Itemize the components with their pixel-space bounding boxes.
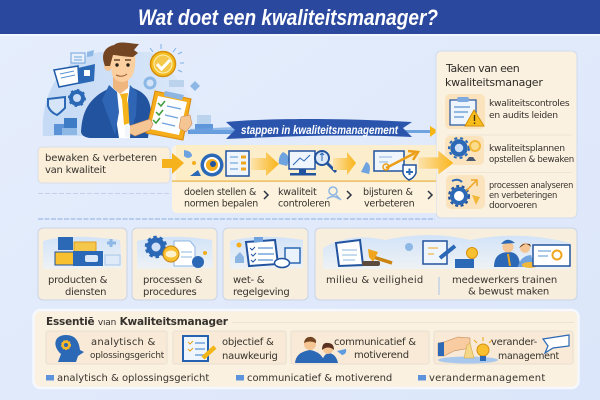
task 3: processen: processen analyseren xyxy=(489,180,573,191)
card: milieu, veiligheid, medewerkers xyxy=(315,228,577,300)
arrow: step 1 to 2 xyxy=(251,152,279,176)
panel: process band xyxy=(172,145,454,213)
chevrons xyxy=(264,191,432,199)
card: wet- en regelgeving xyxy=(223,228,308,300)
task 1: controles xyxy=(445,94,570,129)
clipboard xyxy=(146,91,191,140)
icon: buildings xyxy=(54,118,77,135)
card: wet- en regelgeving: regelgeving xyxy=(233,287,289,298)
trait: objectief: nauwkeurig xyxy=(222,351,278,362)
task 2: plannen xyxy=(445,136,574,165)
step icon: chart with shield xyxy=(361,151,418,180)
ribbon: stappen in kwaliteitsmanagement xyxy=(190,119,438,139)
panel: taken van een kwaliteitsmanager: kwaliteitsmanager xyxy=(445,76,543,89)
task 3: processen: doorvoeren xyxy=(489,200,537,211)
trait: communicatief xyxy=(291,331,429,364)
card: milieu, veiligheid, medewerkers: medewerkers trainen xyxy=(452,275,557,286)
step labels: controleren xyxy=(278,198,330,210)
trait: objectief xyxy=(173,331,286,364)
arrow to tasks xyxy=(430,126,438,137)
arrow: step 2 to 3 xyxy=(333,152,356,175)
step labels: normen bepalen xyxy=(184,198,258,210)
trait: verandermanagement xyxy=(434,331,573,364)
hands xyxy=(125,115,192,137)
title banner: Wat doet een kwaliteitsmanager? xyxy=(138,5,438,30)
bullet list: analytisch & oplossingsgericht xyxy=(57,373,209,384)
small icons right of manager xyxy=(145,78,200,91)
task 2: plannen: opstellen & bewaken xyxy=(489,154,574,165)
icon: gear xyxy=(69,90,85,106)
icon: trainer and colleague xyxy=(494,240,570,268)
trait: communicatief: motiverend xyxy=(354,350,409,361)
heading: taken: Taken van een xyxy=(445,62,520,75)
hero illustration: quality manager xyxy=(43,42,240,140)
card: processen en procedures xyxy=(132,228,217,300)
card: wet- en regelgeving: wet- & xyxy=(233,275,265,286)
bullet list: verandermanagement xyxy=(429,373,545,384)
icon: gold check badge xyxy=(150,44,184,76)
step labels: verbeteren xyxy=(364,198,415,210)
step icon: target xyxy=(184,150,249,176)
box: bewaken en verbeteren xyxy=(38,147,170,183)
task 1: controles: en audits leiden xyxy=(489,110,558,121)
trait: analytisch xyxy=(46,331,167,364)
manager suit xyxy=(81,88,151,138)
trait: communicatief: communicatief & xyxy=(334,337,416,348)
task 3: processen: en verbeteringen xyxy=(489,190,557,201)
step labels xyxy=(184,187,415,210)
bullet list xyxy=(46,373,545,384)
ribbon: stappen in kwaliteitsmanagement: stappen in kwaliteitsmanagement xyxy=(241,123,399,137)
trait: analytisch: analytisch & xyxy=(91,337,155,348)
box: bewaken en verbeteren: bewaken & verbeteren xyxy=(45,153,157,164)
trait: objectief: objectief & xyxy=(222,337,274,348)
icon: document card xyxy=(71,50,94,63)
box: bewaken en verbeteren: van kwaliteit xyxy=(45,165,106,176)
step icon: monitor xyxy=(279,151,336,176)
icon: building right xyxy=(188,115,240,134)
trait: verandermanagement: verander- xyxy=(491,337,538,348)
panel: essentie xyxy=(34,310,578,388)
heading: essentie: Essentiē vıan Kwaliteitsmanager xyxy=(46,316,229,328)
card: milieu, veiligheid, medewerkers: milieu & veiligheid xyxy=(326,275,423,286)
bullet list: communicatief & motiverend xyxy=(247,373,392,384)
step labels: kwaliteit xyxy=(278,187,317,198)
title banner xyxy=(0,0,600,36)
icon: small magnifier xyxy=(327,187,341,200)
manager head xyxy=(103,42,139,94)
icon: document and gavel xyxy=(336,240,392,266)
step labels: doelen stellen & xyxy=(184,187,257,198)
step labels: bijsturen & xyxy=(363,187,414,198)
task 2: plannen: kwaliteitsplannen xyxy=(489,143,565,154)
panel: taken van een kwaliteitsmanager xyxy=(436,51,577,218)
icon: shield xyxy=(48,97,65,115)
card: milieu, veiligheid, medewerkers: & bewust maken xyxy=(468,286,549,298)
icon: open book xyxy=(54,64,95,87)
arrow: step 3 to panel xyxy=(418,150,454,175)
arrow: box to process xyxy=(162,153,184,174)
card: processen en procedures: procedures xyxy=(143,287,196,298)
trait: analytisch: oplossingsgericht xyxy=(90,351,165,361)
task 1: controles: kwaliteitscontroles xyxy=(489,98,570,109)
card: producten en diensten: diensten xyxy=(65,287,106,298)
card: producten en diensten xyxy=(38,228,127,300)
trait: verandermanagement: management xyxy=(498,351,559,362)
card: producten en diensten: producten & xyxy=(48,275,108,286)
icon: chart with pen and bulb xyxy=(405,241,478,268)
dashed dividers xyxy=(38,192,170,194)
task 3: processen xyxy=(446,175,573,211)
card: processen en procedures: processen & xyxy=(143,275,203,286)
